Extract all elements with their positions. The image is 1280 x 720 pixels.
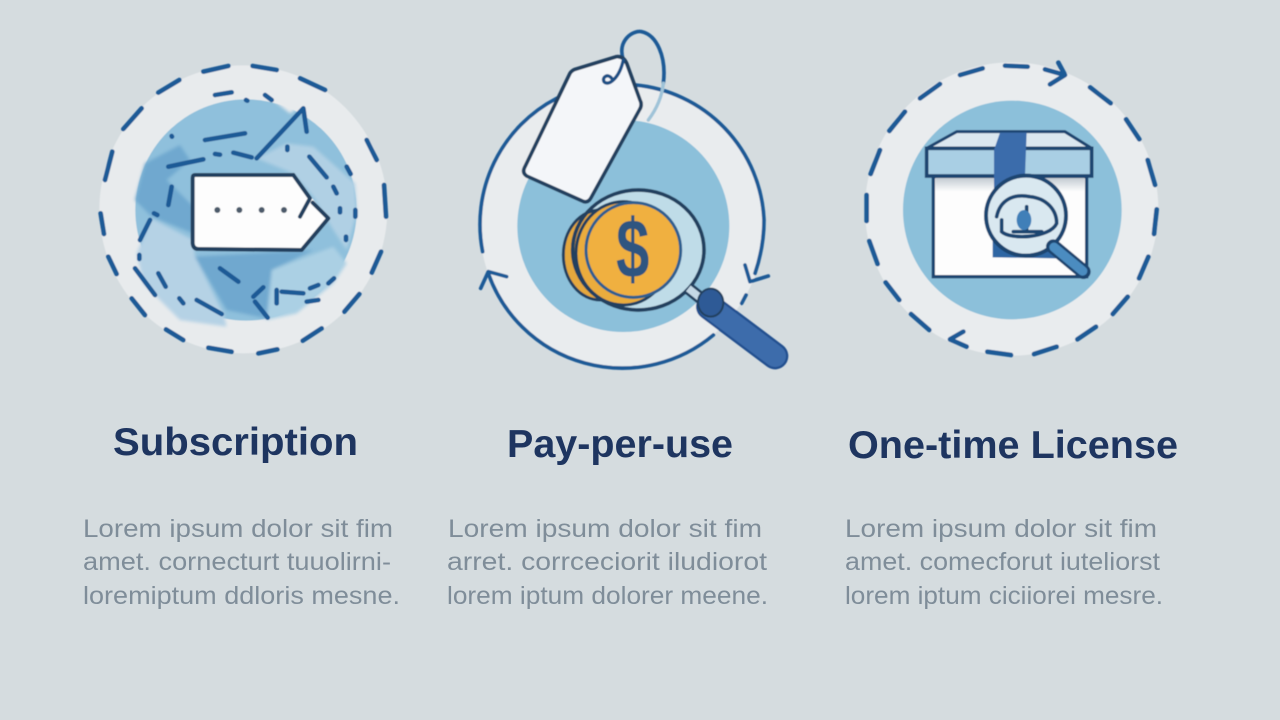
text block: pay-per-use description: lorem iptum dolorer meene. <box>447 582 768 610</box>
text block: pay-per-use description: Lorem ipsum dolor sit fim <box>448 515 762 543</box>
heading: Pay-per-use: Pay-per-use <box>507 423 733 466</box>
inner dashed swirl <box>135 92 355 318</box>
icon: pay-per-use tag, coins and magnifier <box>480 31 775 368</box>
box body <box>933 177 1087 277</box>
text block: one-time license description <box>845 515 1163 610</box>
icon: subscription globe with tag <box>99 65 387 353</box>
text block: subscription description: Lorem ipsum dolor sit fim <box>83 515 393 543</box>
circular arrows <box>480 85 768 368</box>
heading: One-time License: One-time License <box>848 424 1178 467</box>
magnifier <box>986 176 1083 272</box>
magnifier lens and coins <box>563 190 704 310</box>
tag <box>193 175 328 250</box>
dashed ring with arrows <box>867 63 1157 355</box>
text block: one-time license description: lorem iptum ciciiorei mesre. <box>845 582 1163 610</box>
heading: Subscription: Subscription <box>113 421 358 464</box>
icon: one-time license box with magnifier <box>865 62 1158 356</box>
text block: pay-per-use description <box>447 515 768 610</box>
outer dashed ring <box>101 66 386 353</box>
string loop <box>622 31 664 83</box>
text block: one-time license description: amet. comecforut iuteliorst <box>845 548 1160 576</box>
box lid and ribbon <box>927 132 1092 189</box>
magnifier handle <box>688 288 775 356</box>
text block: pay-per-use description: arret. corrceciorit iludiorot <box>447 548 767 576</box>
text block: one-time license description: Lorem ipsum dolor sit fim <box>845 515 1157 543</box>
price tag <box>524 57 641 202</box>
text block: subscription description: amet. cornecturt tuuolirni- <box>83 548 391 576</box>
text block: subscription description: loremiptum ddloris mesne. <box>83 582 400 610</box>
text block: subscription description <box>83 515 400 610</box>
magnifier lens and coins: $ <box>616 203 649 296</box>
